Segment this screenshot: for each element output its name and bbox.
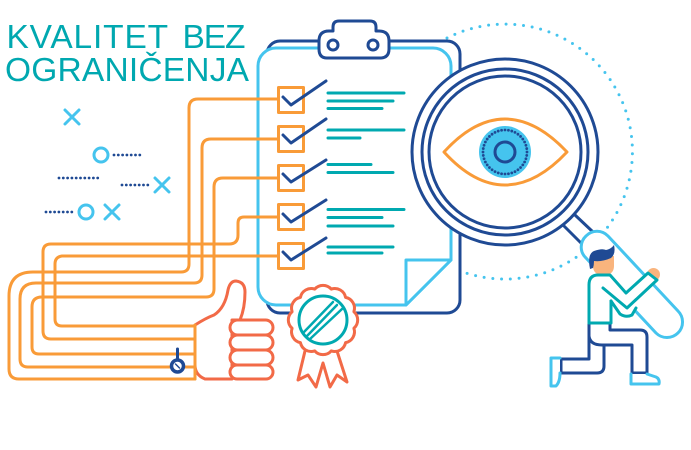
person kneeling (551, 245, 660, 386)
title: KVALITET (6, 19, 168, 56)
front shoe (631, 374, 659, 384)
clipboard board (267, 41, 460, 313)
legs (561, 322, 647, 373)
orange connector lines (9, 99, 278, 379)
clipboard (258, 21, 460, 313)
folded corner (406, 260, 451, 305)
text lines (328, 93, 404, 253)
torso and arm (589, 273, 657, 323)
award rosette (288, 285, 358, 387)
eye (444, 119, 567, 185)
rosette seal (299, 296, 347, 344)
ribbons (298, 351, 347, 387)
cuff edge (194, 325, 196, 379)
back shoe (551, 358, 560, 386)
hand (647, 268, 660, 281)
head (593, 256, 614, 275)
magnifying glass handle (563, 215, 593, 245)
title: BEZ (182, 19, 246, 56)
paper sheet with folded corner (258, 48, 451, 305)
clip (319, 21, 389, 58)
title: OGRANIČENJA (5, 51, 250, 89)
checkboxes with check marks (278, 81, 326, 268)
cuff button (172, 349, 184, 372)
rosette edge (288, 285, 358, 355)
handle grip (581, 231, 683, 338)
dotted circle behind magnifier (447, 24, 632, 279)
palm and thumb (195, 281, 245, 379)
thumbs up (195, 281, 273, 379)
decorative symbols: crosses, circles and dotted lines (46, 110, 169, 219)
title (5, 19, 250, 89)
hair (589, 245, 615, 269)
fingers (230, 320, 273, 335)
magnifying glass lens (412, 59, 598, 245)
